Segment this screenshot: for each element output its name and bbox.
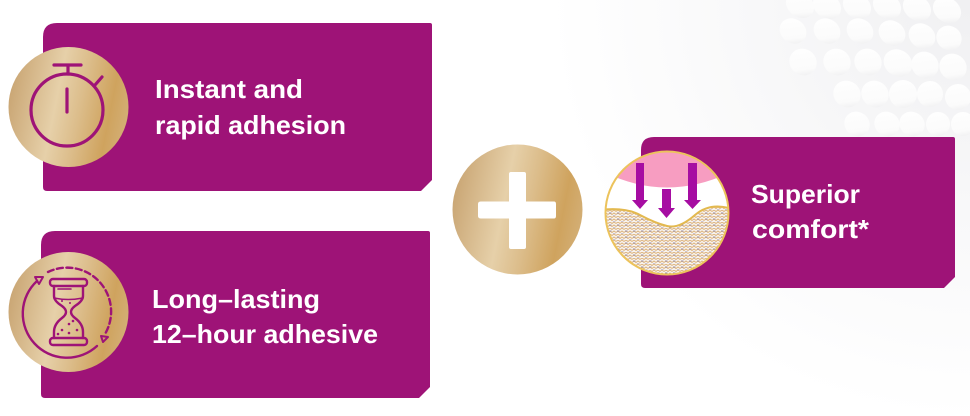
icon: plus in gold circle — [452, 144, 582, 274]
background dot pattern — [500, 0, 970, 416]
icon: stopwatch — [8, 47, 128, 167]
heading: instant and rapid adhesion: rapid adhesion — [155, 110, 346, 140]
heading: superior comfort: Superior — [751, 179, 860, 209]
card background — [43, 23, 432, 191]
card background — [41, 231, 430, 398]
heading: long-lasting 12-hour adhesive: Long–lasting — [152, 284, 320, 314]
panel: superior comfort — [600, 137, 955, 288]
panel: instant and rapid adhesion — [8, 23, 432, 191]
heading: superior comfort: comfort* — [752, 214, 870, 244]
heading: long-lasting 12-hour adhesive — [152, 284, 378, 349]
heading: long-lasting 12-hour adhesive: 12–hour adhesive — [152, 319, 378, 349]
card background — [641, 137, 955, 288]
icon: cushion foam with pressure arrows — [604, 150, 730, 276]
heading: superior comfort — [751, 179, 870, 244]
icon: hourglass with cycle arrows — [8, 252, 128, 372]
panel: long-lasting 12-hour adhesive — [8, 231, 430, 398]
heading: instant and rapid adhesion — [155, 74, 346, 140]
heading: instant and rapid adhesion: Instant and — [155, 74, 303, 104]
